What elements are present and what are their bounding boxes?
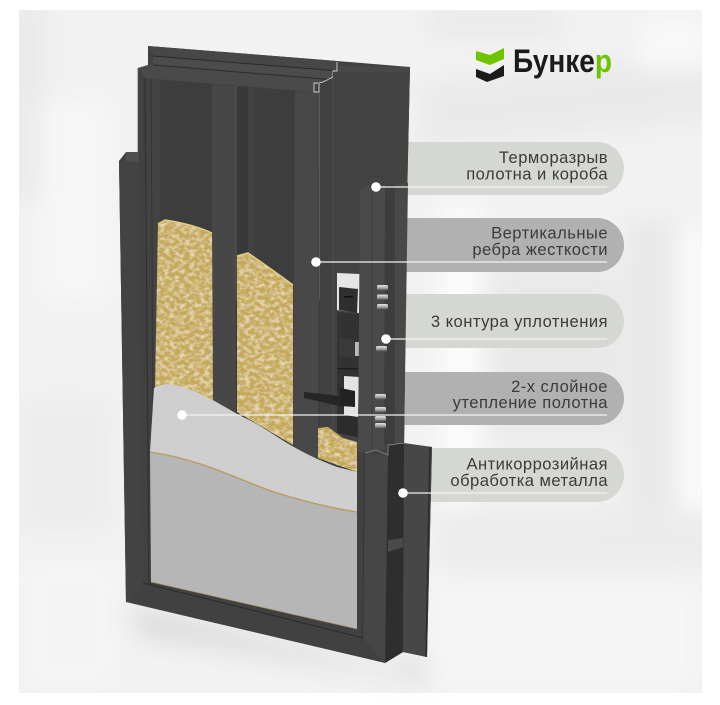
- leader line: [403, 492, 607, 494]
- logo icon: double chevron: [476, 48, 504, 82]
- locking bolts: [375, 285, 388, 428]
- label text: Вертикальные: [491, 224, 608, 242]
- door silhouette: [119, 46, 432, 663]
- label text: Терморазрыв: [499, 148, 608, 167]
- door illustration: [119, 46, 432, 663]
- door handle: [304, 392, 340, 406]
- callout: thermal break: [371, 148, 608, 192]
- pill: thermal break: [340, 142, 624, 195]
- label text line 2: ребра жесткости: [472, 240, 608, 259]
- wool insulation layer: [155, 220, 357, 472]
- pill: vertical ribs: [340, 218, 624, 272]
- marker dot: [311, 257, 321, 267]
- label text: Антикоррозийная: [466, 454, 608, 474]
- leader line: [316, 261, 607, 263]
- logo wordmark: Бункер: [513, 43, 612, 79]
- marker dot: [177, 410, 187, 420]
- leader line: [182, 414, 607, 416]
- label text: 3 контура уплотнения: [431, 312, 608, 331]
- label text line 2: полотна и короба: [466, 164, 608, 184]
- gold seam line: [150, 452, 357, 512]
- callout: seal contours: [381, 312, 608, 344]
- label text line 2: обработка металла: [450, 471, 608, 490]
- callout: insulation: [177, 377, 608, 420]
- foam insulation layer: [150, 384, 357, 514]
- lock strike plate: [337, 273, 360, 313]
- side column: [320, 66, 410, 470]
- callout: anti-corrosion: [398, 454, 608, 498]
- vertical stiffening ribs: [212, 84, 320, 465]
- pill: seal contours: [340, 294, 624, 348]
- right rail and flange: [363, 443, 432, 663]
- lock stile: [358, 183, 408, 452]
- marker dot: [381, 334, 391, 344]
- label text line 2: утепление полотна: [453, 393, 608, 412]
- pill: insulation: [340, 372, 624, 425]
- marker dot: [398, 488, 408, 498]
- top profile: [138, 46, 337, 92]
- callout: vertical ribs: [311, 224, 608, 267]
- callout pills: [340, 142, 624, 502]
- frame inner edge: [143, 453, 365, 638]
- logo: Бункер: [476, 43, 612, 82]
- left frame verticals: [119, 68, 160, 602]
- door shadow: [130, 606, 428, 680]
- lock body: [304, 273, 360, 438]
- lower plate: [344, 376, 359, 417]
- label text: 2-х слойное: [511, 377, 608, 396]
- metal sheet panel: [150, 452, 357, 629]
- marker dot: [371, 182, 381, 192]
- interior panel: [160, 80, 320, 470]
- leader line: [376, 186, 607, 188]
- leader line: [386, 338, 607, 340]
- pill: anti-corrosion: [340, 448, 624, 502]
